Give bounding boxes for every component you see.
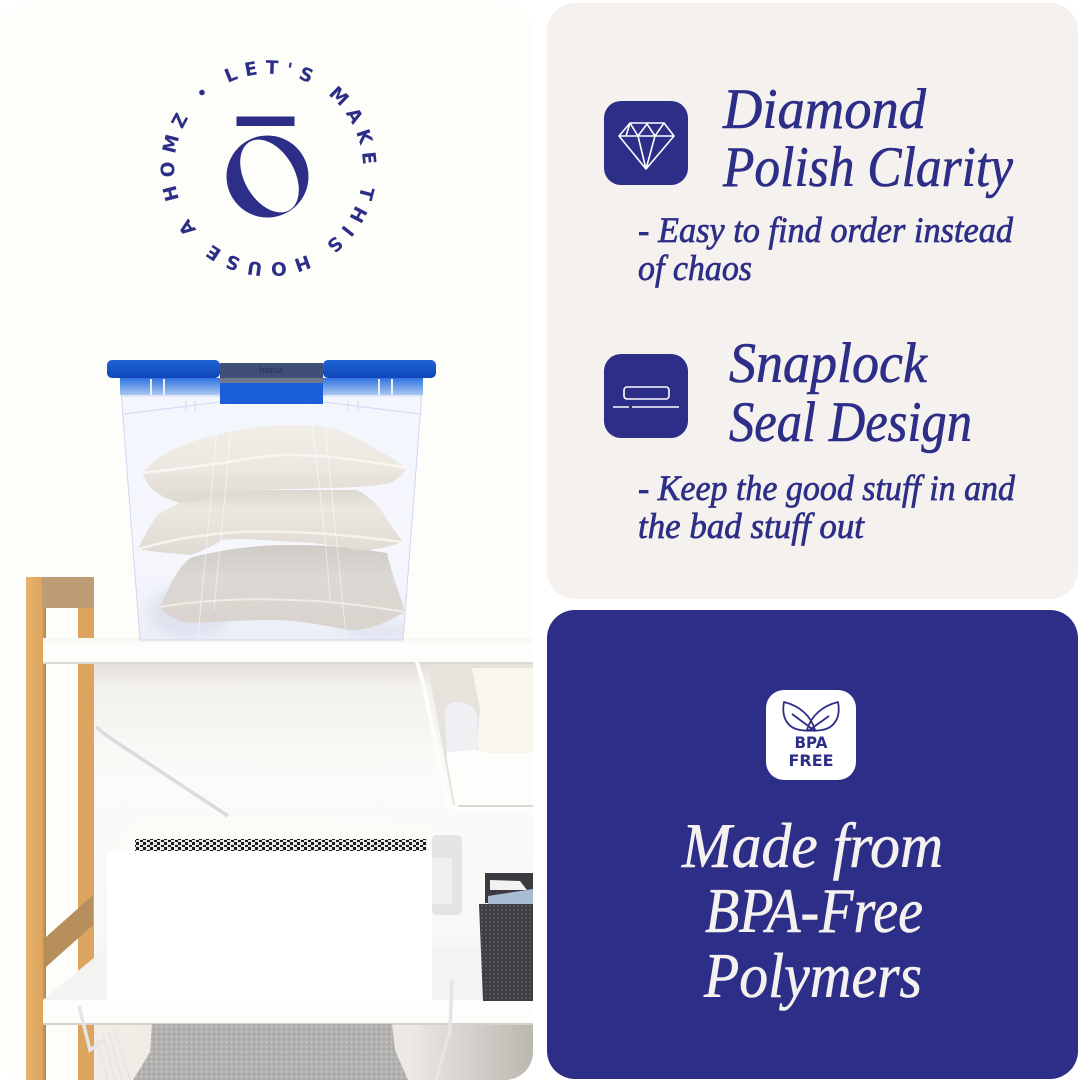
lid: [220, 383, 323, 404]
text: diamond description: - Easy to find order instead: [638, 210, 1014, 250]
pillow top: [142, 425, 407, 503]
wall outlet: [432, 835, 462, 915]
box rim: [120, 378, 220, 395]
support rod: [96, 727, 228, 816]
icon: snaplock seal: [604, 354, 688, 438]
heading: made from bpa-free polymers: [681, 810, 943, 1011]
heading: snaplock seal design: Snaplock: [729, 332, 929, 395]
heading: made from bpa-free polymers: Made from: [681, 810, 943, 881]
grey knit blanket: [133, 1024, 408, 1080]
pillow bottom: [160, 545, 405, 630]
box body: [120, 378, 423, 640]
wooden shelf frame: [26, 577, 94, 1080]
heading: diamond polish clarity: Diamond: [722, 78, 926, 141]
text: diamond description: of chaos: [638, 248, 752, 288]
heading: snaplock seal design: Seal Design: [729, 391, 972, 454]
wire basket upper right: [415, 662, 533, 807]
logo bar: [236, 116, 294, 126]
heading: diamond polish clarity: Polish Clarity: [722, 136, 1014, 199]
panel: features: [547, 3, 1078, 599]
box straps: [198, 402, 346, 636]
upper shelf: [43, 638, 533, 664]
heading: snaplock seal design: [729, 332, 972, 454]
white fabric bin: [107, 839, 432, 1000]
heading: diamond polish clarity: [722, 78, 1014, 199]
heading: made from bpa-free polymers: BPA-Free: [705, 875, 923, 946]
panel: bpa free: [547, 610, 1078, 1079]
text: seal description: the bad stuff out: [638, 506, 865, 546]
icon: diamond: [604, 101, 688, 185]
brand on lid: homz: [259, 365, 283, 375]
slogan dot: [199, 90, 205, 95]
icon: bpa free leaves: BPA: [794, 733, 828, 752]
logo: brand badge: [160, 60, 376, 276]
wire brackets: [79, 980, 452, 1080]
pillow middle: [138, 490, 403, 555]
lower shelf: [43, 958, 533, 1025]
panel: product photo: [26, 360, 533, 1080]
text: seal description: - Keep the good stuff in and: [638, 468, 1016, 508]
wall behind shelves: [94, 664, 533, 732]
text: seal description: [638, 468, 1016, 546]
icon: bpa free leaves: FREE: [788, 751, 834, 770]
logo ring: [226, 136, 308, 218]
icon: bpa free leaves: [766, 690, 856, 780]
text: diamond description: [638, 210, 1014, 288]
storage box with pillows: [107, 360, 436, 642]
dark woven basket: [479, 873, 533, 1001]
heading: made from bpa-free polymers: Polymers: [703, 940, 922, 1011]
circular slogan: LET'S MAKE THIS HOUSE A HOMZ: [160, 60, 376, 276]
